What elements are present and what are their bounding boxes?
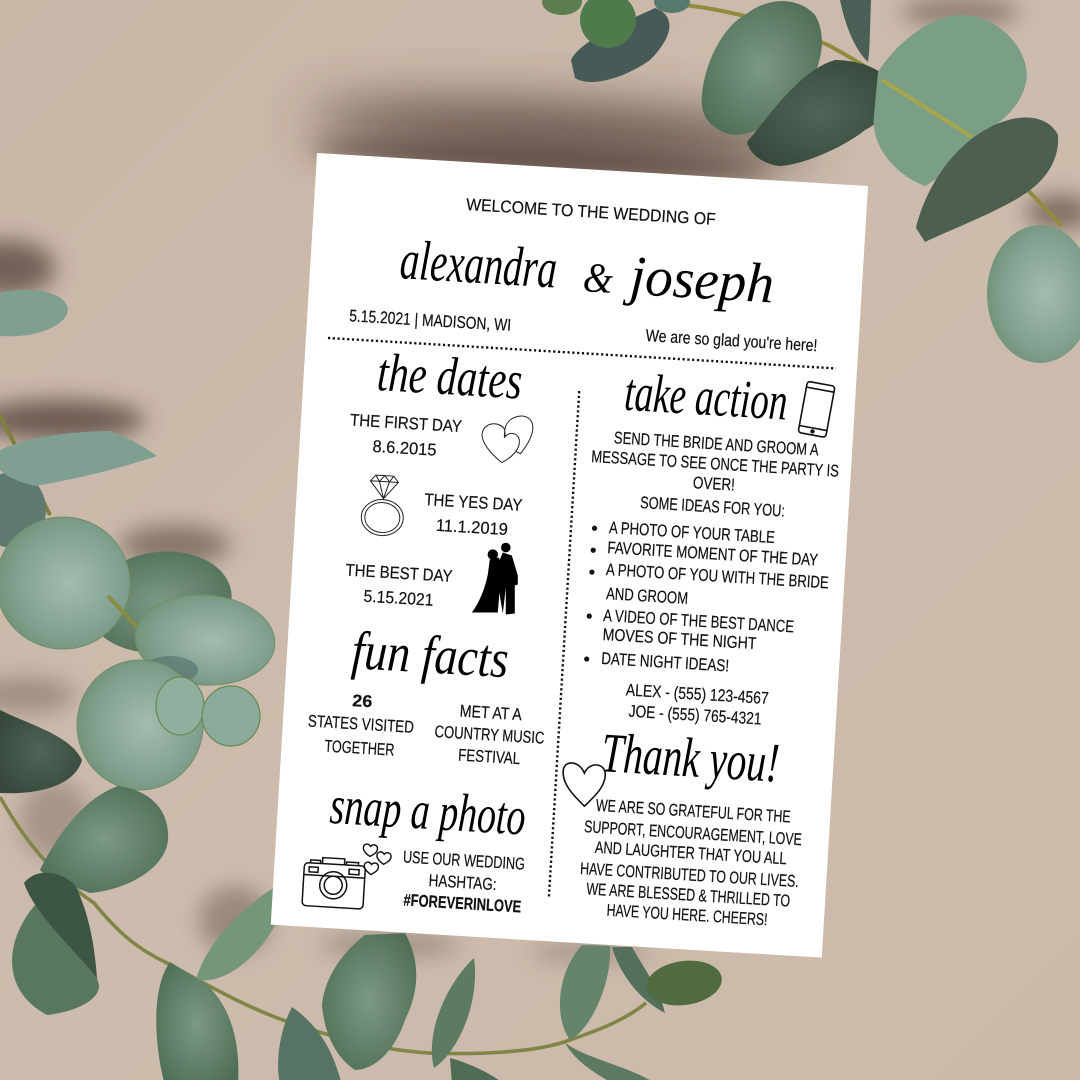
text: first day	[348, 410, 462, 461]
text: states visited: STATES VISITED	[307, 711, 414, 737]
text: how they met: MET AT A	[459, 702, 523, 724]
text: thank you message: AND LAUGHTER THAT YOU ALL	[594, 838, 787, 868]
text: thank you message: WE ARE SO GRATEFUL FOR THE	[595, 796, 791, 827]
text: best day: THE BEST DAY	[345, 560, 453, 586]
title: couple names	[398, 229, 776, 316]
list: ideas: AND GROOM	[606, 584, 689, 608]
text: phone numbers	[624, 680, 769, 729]
text: hashtag instructions: USE OUR WEDDING	[402, 847, 525, 874]
list: ideas: A PHOTO OF YOUR TABLE	[609, 518, 775, 547]
icon: two hearts	[480, 414, 534, 464]
text: yes day	[422, 490, 523, 540]
text: how they met	[433, 700, 546, 770]
list: ideas: A PHOTO OF YOU WITH THE BRIDE	[606, 560, 829, 592]
text: phone numbers: ALEX - (555) 123-4567	[625, 680, 769, 708]
panel: white wedding program card	[271, 153, 868, 958]
heading: snap a photo: snap a photo	[328, 775, 527, 847]
icon: heart	[561, 762, 606, 807]
text: yes day: 11.1.2019	[435, 516, 508, 539]
text: date and place: 5.15.2021 | MADISON, WI	[349, 306, 512, 335]
list: ideas: DATE NIGHT IDEAS!	[601, 649, 730, 676]
text: message request: OVER!	[692, 473, 735, 495]
icon: camera	[302, 857, 366, 909]
text: first day: THE FIRST DAY	[350, 410, 462, 436]
text: first day: 8.6.2015	[372, 437, 437, 460]
text: greeting: We are so glad you're here!	[645, 326, 818, 355]
text: how they met: FESTIVAL	[458, 746, 521, 768]
text: message request: SOME IDEAS FOR YOU:	[640, 493, 785, 521]
heading: fun facts: fun facts	[350, 620, 510, 689]
text: hashtag instructions: HASHTAG:	[428, 871, 497, 894]
heading: thank you: Thank you!	[600, 722, 781, 795]
list: ideas: A VIDEO OF THE BEST DANCE	[603, 606, 795, 636]
text: thank you message	[577, 795, 804, 931]
text: how they met: COUNTRY MUSIC	[434, 722, 545, 748]
icon: couple silhouette	[472, 543, 518, 615]
text: thank you message: SUPPORT, ENCOURAGEMENT, LOVE	[584, 817, 802, 849]
icon: diamond ring	[360, 474, 406, 537]
title: couple names: joseph	[622, 245, 776, 316]
heading: welcome line: WELCOME TO THE WEDDING OF	[466, 195, 716, 229]
text: hashtag instructions: #FOREVERINLOVE	[403, 891, 522, 917]
eucalyptus branch: bottom	[0, 710, 725, 1080]
text: yes day: THE YES DAY	[424, 490, 523, 515]
panel: the dates	[339, 341, 537, 618]
list: ideas: FAVORITE MOMENT OF THE DAY	[607, 538, 819, 570]
panel: take action	[576, 360, 845, 732]
text: message request: SEND THE BRIDE AND GROOM A	[613, 428, 820, 460]
eucalyptus branch: top right	[542, 0, 1080, 363]
text: best day: 5.15.2021	[363, 587, 434, 610]
text: hashtag instructions	[400, 847, 525, 917]
title: couple names: &	[582, 255, 615, 303]
text: states visited	[306, 689, 416, 761]
heading: take action: take action	[623, 362, 789, 432]
text: thank you message: WE ARE BLESSED & THRILLED TO	[586, 879, 791, 911]
text: phone numbers: JOE - (555) 765-4321	[628, 702, 762, 729]
text: best day	[344, 560, 453, 611]
icon: small hearts	[362, 844, 392, 876]
icon: phone	[798, 381, 835, 437]
panel: thank you	[554, 720, 808, 931]
text: thank you message: HAVE YOU HERE. CHEERS!	[606, 901, 768, 929]
text: states visited: TOGETHER	[324, 737, 395, 760]
title: couple names: alexandra	[398, 229, 559, 301]
panel: snap a photo	[302, 774, 529, 919]
list: ideas: MOVES OF THE NIGHT	[602, 625, 757, 653]
text: message request: MESSAGE TO SEE ONCE THE PARTY IS	[591, 447, 839, 481]
heading: the dates: the dates	[376, 342, 524, 411]
panel: fun facts	[306, 618, 551, 770]
text: states visited: 26	[352, 691, 373, 711]
eucalyptus branch: left	[0, 286, 278, 790]
text: thank you message: HAVE CONTRIBUTED TO OUR LIVES.	[580, 859, 799, 891]
list: ideas	[584, 517, 832, 681]
text: message request	[588, 427, 841, 524]
